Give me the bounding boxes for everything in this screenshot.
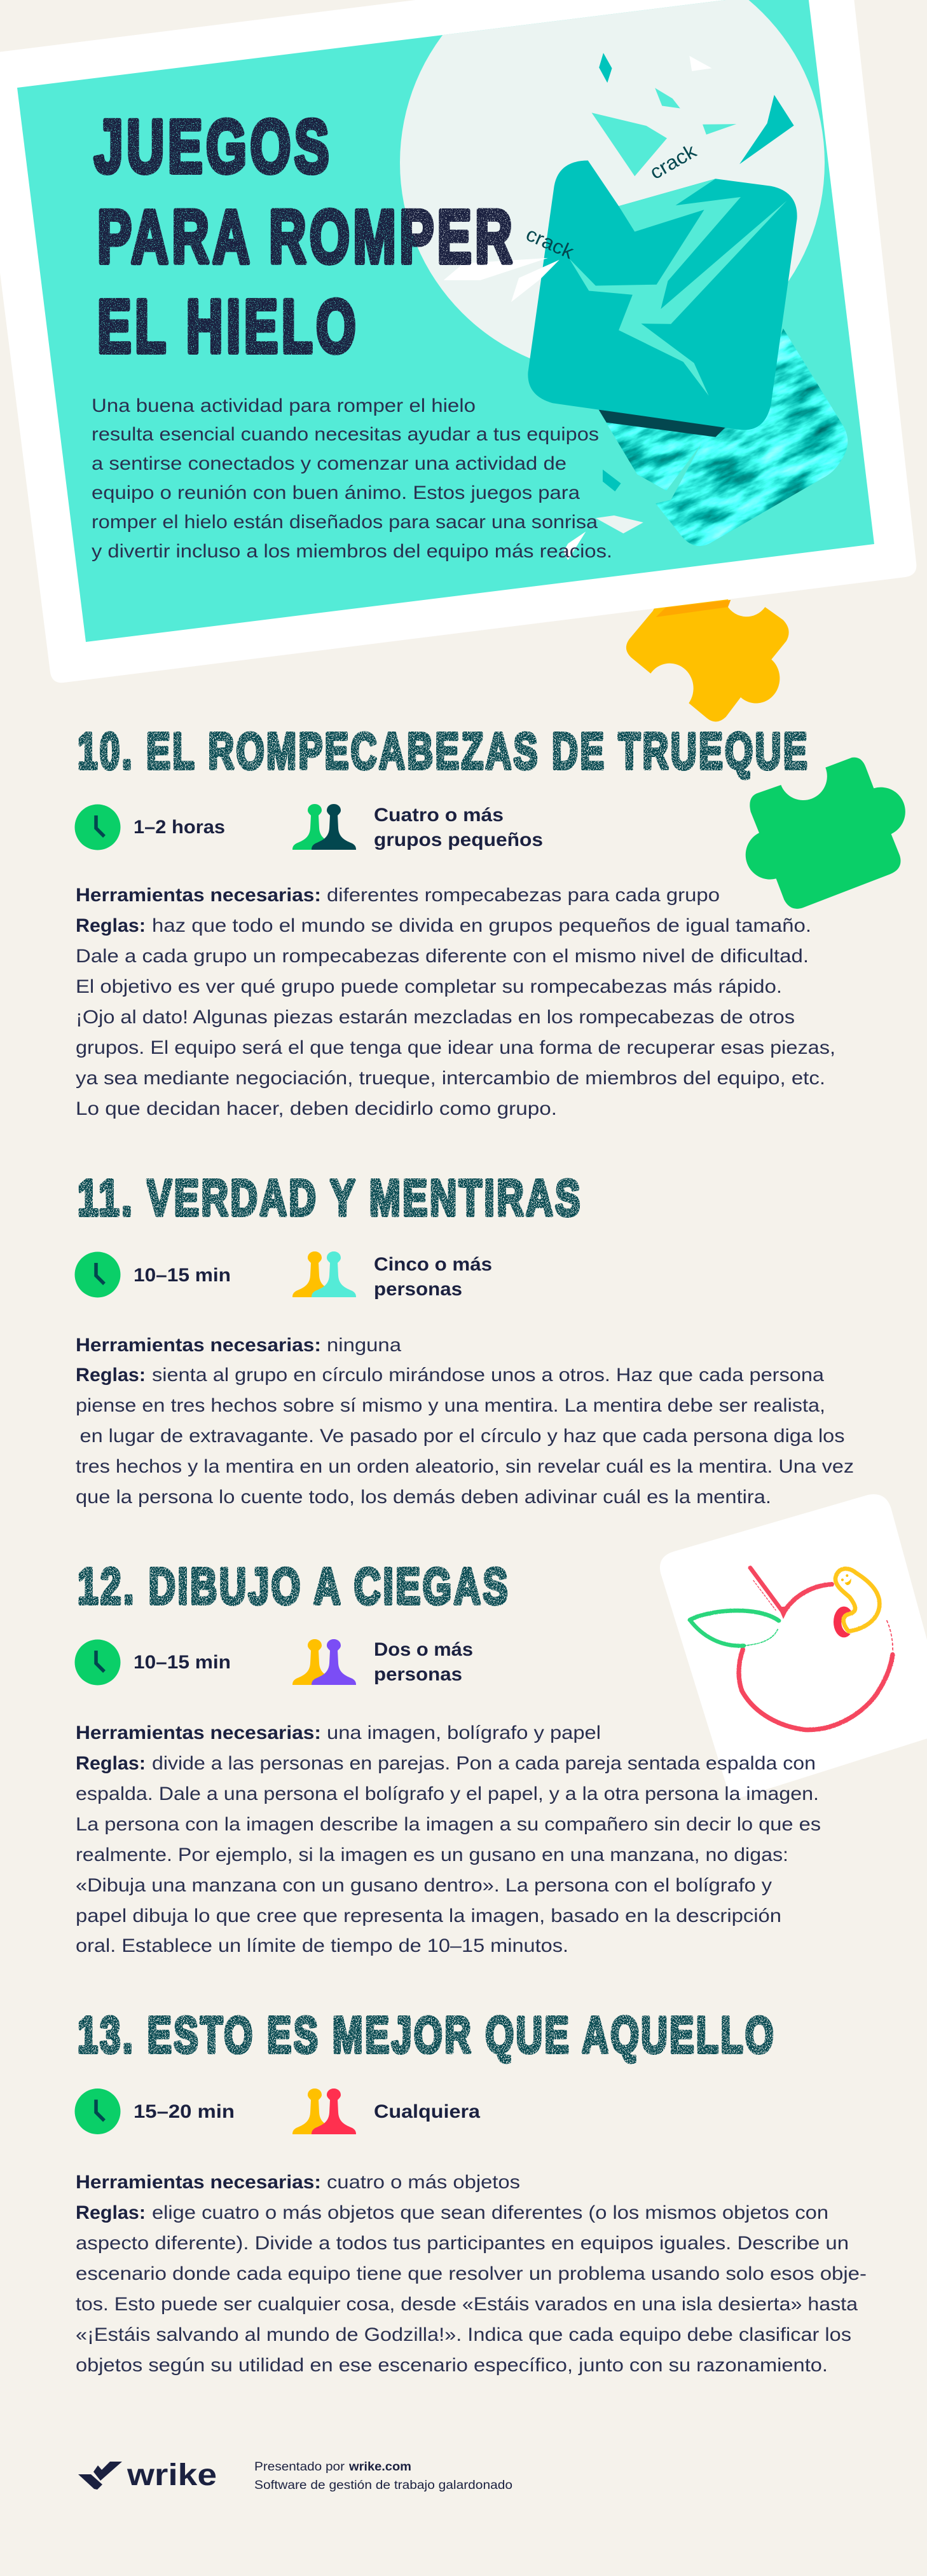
body text 11: sienta al grupo en círculo mirándose unos a otros. Haz que cada persona (152, 1365, 824, 1386)
icon: pawns (292, 2089, 356, 2134)
body text 10: ¡Ojo al dato! Algunas piezas estarán mezcladas en los rompecabezas de otros (76, 1007, 795, 1028)
intro text (92, 395, 612, 562)
icon: wrike logo mark (78, 2462, 122, 2490)
title: JUEGOS (94, 105, 333, 189)
body text 10: Lo que decidan hacer, deben decidirlo como grupo. (76, 1098, 557, 1119)
body text 13: aspecto diferente). Divide a todos tus participantes en equipos iguales. Describe un (76, 2233, 849, 2254)
credit text: Software de gestión de trabajo galardonado (254, 2479, 512, 2492)
body text 11: tres hechos y la mentira en un orden aleatorio, sin revelar cuál es la mentira. Una vez (76, 1456, 854, 1477)
marble texture (599, 328, 848, 546)
body text 13: tos. Esto puede ser cualquier cosa, desde «Estáis varados en una isla desierta» hasta (76, 2294, 858, 2315)
title (94, 105, 516, 369)
body text 11: Reglas: (76, 1365, 146, 1386)
body text 13 (76, 2172, 867, 2376)
section 10 (75, 723, 835, 1119)
body text 12: realmente. Por ejemplo, si la imagen es un gusano en una manzana, no digas: (76, 1844, 788, 1865)
body text 10: Dale a cada grupo un rompecabezas diferente con el mismo nivel de dificultad. (76, 946, 809, 967)
pale circle (400, 0, 825, 375)
group size: Cinco o más (374, 1254, 492, 1275)
credit text: wrike.com (348, 2460, 411, 2474)
intro text: romper el hielo están diseñados para sacar una sonrisa (92, 512, 598, 533)
group size: grupos pequeños (374, 829, 543, 850)
heading 12: 12. DIBUJO A CIEGAS (78, 1558, 510, 1614)
body text 12: espalda. Dale a una persona el bolígrafo y el papel, y a la otra persona la imagen. (76, 1783, 819, 1804)
body text 12: divide a las personas en parejas. Pon a cada pareja sentada espalda con (152, 1753, 816, 1774)
body text 13: elige cuatro o más objetos que sean diferentes (o los mismos objetos con (152, 2202, 828, 2223)
wrike wordmark: wrike (127, 2458, 217, 2492)
section 11 (75, 1169, 854, 1508)
body text 10: grupos. El equipo será el que tenga que idear una forma de recuperar esas piezas, (76, 1037, 835, 1058)
panel: apple drawing card (660, 1494, 927, 1801)
body text 12: Reglas: (76, 1753, 146, 1774)
credit text (254, 2460, 512, 2492)
duration: 1–2 horas (134, 817, 225, 838)
body text 12: «Dibuja una manzana con un gusano dentro». La persona con el bolígrafo y (76, 1875, 772, 1896)
icon: clock (75, 2089, 121, 2134)
intro text: a sentirse conectados y comenzar una actividad de (92, 453, 566, 474)
footer (78, 2458, 512, 2492)
intro text: equipo o reunión con buen ánimo. Estos juegos para (92, 482, 580, 503)
body text 13: escenario donde cada equipo tiene que resolver un problema usando solo esos obje- (76, 2263, 867, 2284)
icon: yellow puzzle piece (626, 585, 789, 722)
intro text: Una buena actividad para romper el hielo (92, 395, 476, 416)
icon: clock (75, 1252, 121, 1298)
body text 10: diferentes rompecabezas para cada grupo (327, 885, 720, 906)
body text 10: El objetivo es ver qué grupo puede completar su rompecabezas más rápido. (76, 976, 782, 997)
body text 12: oral. Establece un límite de tiempo de 10–15 minutos. (76, 1935, 568, 1956)
icon: apple with worm (690, 1568, 893, 1730)
body text 11: que la persona lo cuente todo, los demás deben adivinar cuál es la mentira. (76, 1487, 771, 1508)
body text 11: ninguna (327, 1335, 401, 1356)
intro text: y divertir incluso a los miembros del equipo más reacios. (92, 541, 612, 562)
crack label top: crack (646, 139, 700, 184)
card frame (0, 0, 916, 683)
body text 10 (76, 885, 835, 1119)
panel: hero card (0, 0, 927, 694)
section 12 (75, 1558, 821, 1956)
group size (374, 1639, 473, 1685)
body text 12: una imagen, bolígrafo y papel (327, 1722, 601, 1743)
group size: Dos o más (374, 1639, 473, 1660)
group size: Cualquiera (374, 2101, 480, 2122)
body text 13: cuatro o más objetos (327, 2172, 520, 2193)
title: EL HIELO (97, 285, 359, 369)
duration: 15–20 min (134, 2101, 235, 2122)
duration: 10–15 min (134, 1265, 231, 1286)
ice block with cracks (444, 53, 797, 560)
heading 11: 11. VERDAD Y MENTIRAS (78, 1169, 582, 1226)
group size (374, 805, 543, 850)
body text 13: Reglas: (76, 2202, 146, 2223)
crack label left: crack (523, 222, 577, 263)
intro text: resulta esencial cuando necesitas ayudar a tus equipos (92, 424, 599, 445)
body text 12: La persona con la imagen describe la imagen a su compañero sin decir lo que es (76, 1814, 821, 1835)
body text 10: haz que todo el mundo se divida en grupos pequeños de igual tamaño. (152, 915, 811, 936)
hero illustration (17, 0, 874, 642)
group size (374, 1254, 492, 1300)
body text 13: Herramientas necesarias: (76, 2172, 321, 2193)
body text 11: en lugar de extravagante. Ve pasado por el círculo y haz que cada persona diga los (80, 1426, 844, 1447)
body text 12: papel dibuja lo que cree que representa la imagen, basado en la descripción (76, 1905, 781, 1926)
body text 11 (76, 1335, 854, 1508)
title: PARA ROMPER (97, 195, 516, 279)
body text 13: objetos según su utilidad en ese escenario específico, junto con su razonamiento. (76, 2355, 828, 2376)
body text 12 (76, 1722, 821, 1956)
icon: clock (75, 805, 121, 850)
section 13 (75, 2007, 867, 2376)
body text 11: Herramientas necesarias: (76, 1335, 321, 1356)
body text 11: piense en tres hechos sobre sí mismo y una mentira. La mentira debe ser realista, (76, 1395, 825, 1416)
body text 10: Reglas: (76, 915, 146, 936)
group size: Cuatro o más (374, 805, 504, 826)
icon: pawns (292, 804, 356, 850)
body text 13: «¡Estáis salvando al mundo de Godzilla!». Indica que cada equipo debe clasificar los (76, 2324, 851, 2345)
duration: 10–15 min (134, 1652, 231, 1673)
body text 10: Herramientas necesarias: (76, 885, 321, 906)
icon: green puzzle piece (746, 758, 905, 909)
credit text: Presentado por (254, 2460, 345, 2474)
body text 12: Herramientas necesarias: (76, 1722, 321, 1743)
icon: clock (75, 1640, 121, 1686)
group size: personas (374, 1279, 462, 1300)
body text 10: ya sea mediante negociación, trueque, intercambio de miembros del equipo, etc. (76, 1068, 825, 1089)
group size: personas (374, 1664, 462, 1685)
icon: pawns (292, 1639, 356, 1685)
icon: pawns (292, 1251, 356, 1297)
